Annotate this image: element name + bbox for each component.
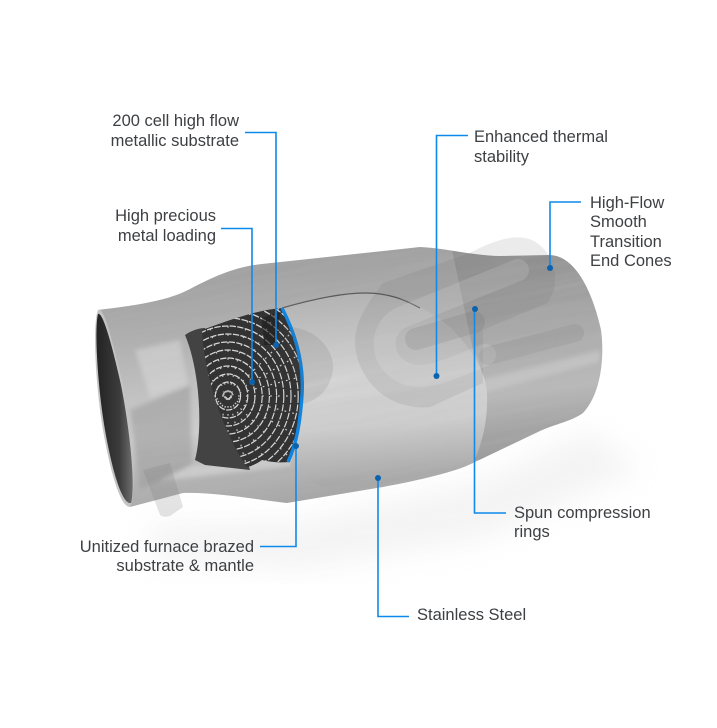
watermark: left letter (143, 327, 333, 517)
inlet opening (95, 310, 134, 507)
callout: enhanced thermal stability: stability (474, 148, 530, 166)
callout: high-flow smooth transition end cones: Smooth (590, 213, 647, 231)
ground shadow (150, 430, 640, 570)
callout: stainless steel: Stainless Steel (417, 606, 526, 624)
callout: high-flow smooth transition end cones: High-Flow (590, 194, 664, 212)
callout: 200 cell high flow metallic substrate: metallic substrate (111, 132, 239, 150)
callout: high precious metal loading (115, 207, 255, 385)
callout: high precious metal loading: metal loading (118, 227, 216, 245)
callout: 200 cell high flow metallic substrate (111, 112, 279, 348)
callout: high-flow smooth transition end cones: Transition (590, 233, 662, 251)
callout: high-flow smooth transition end cones: End Cones (590, 252, 672, 270)
watermark: right letter (355, 237, 575, 407)
callout: enhanced thermal stability: Enhanced thermal (474, 128, 608, 146)
infographic: catalytic converter with callouts (81, 114, 671, 620)
callout: enhanced thermal stability (434, 128, 608, 379)
watermark logo overlay (143, 237, 575, 517)
inner cylinder exposed by cutaway (282, 293, 487, 492)
callout: high-flow smooth transition end cones (547, 194, 672, 271)
callout: high precious metal loading: High precious (115, 207, 216, 225)
callout: stainless steel (375, 475, 526, 624)
converter body (98, 240, 620, 507)
callout: 200 cell high flow metallic substrate: 200 cell high flow (112, 112, 239, 130)
callout: spun compression rings: rings (514, 523, 550, 541)
cutaway shell edge (282, 293, 420, 308)
callout: spun compression rings (472, 306, 651, 541)
brushed metal texture (282, 299, 414, 308)
callout: unitized furnace brazed substrate and mantle (80, 443, 299, 575)
callout: unitized furnace brazed substrate and mantle: substrate & mantle (116, 557, 254, 575)
callout: unitized furnace brazed substrate and mantle: Unitized furnace brazed (80, 538, 254, 556)
callout: spun compression rings: Spun compression (514, 504, 651, 522)
cutaway dark cavity (185, 328, 250, 470)
metallic substrate mesh (202, 308, 301, 467)
blue mantle ring (282, 308, 302, 462)
